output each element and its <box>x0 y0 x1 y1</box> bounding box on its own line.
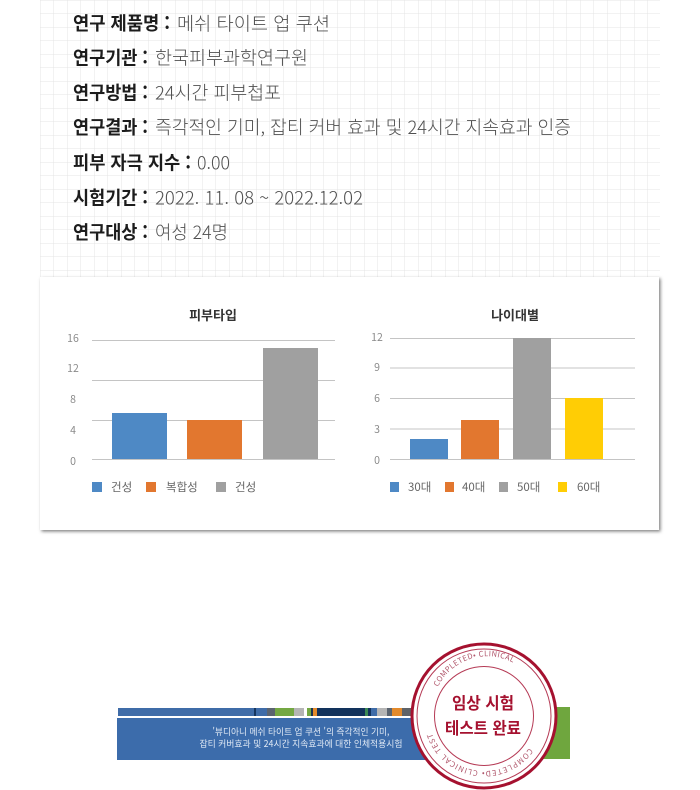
blue caption panel <box>117 718 437 760</box>
curved text <box>426 650 532 776</box>
curved text: COMPLETED• CLINICAL TEST <box>426 735 532 776</box>
y axis labels: 6 <box>374 391 380 406</box>
row: institution: 한국피부과학연구원 <box>155 44 308 70</box>
row: method: 연구방법 : <box>73 80 148 106</box>
stamp: clinical test completed <box>410 642 558 790</box>
stamp title: 임상 시험 <box>452 690 514 714</box>
row: institution <box>73 44 308 70</box>
row: result: 연구결과 : <box>73 114 148 140</box>
chart title: 나이대별 <box>491 305 539 324</box>
caption text: '뷰디아니 메쉬 타이트 업 쿠션 '의 즉각적인 기미, <box>212 724 390 738</box>
stamp title: 테스트 완료 <box>445 715 521 739</box>
y axis labels: 3 <box>374 422 380 437</box>
legend: 40대 <box>462 479 485 495</box>
panel: charts <box>40 277 659 530</box>
green block <box>540 707 570 759</box>
row: test period: 2022. 11. 08 ~ 2022.12.02 <box>155 184 363 210</box>
y axis labels <box>371 330 383 468</box>
row: institution: 연구기관 : <box>73 44 148 70</box>
study details list <box>73 10 571 245</box>
row: method <box>73 80 281 106</box>
row: subjects: 연구대상 : <box>73 219 148 245</box>
y axis labels: 12 <box>371 330 383 345</box>
y axis labels: 8 <box>70 392 76 407</box>
legend <box>390 479 600 495</box>
chart: skin type <box>67 305 335 495</box>
chart title: 피부타입 <box>189 305 237 324</box>
bars <box>112 348 318 459</box>
caption text: 잡티 커버효과 및 24시간 지속효과에 대한 인체적용시험 <box>200 736 402 750</box>
y axis labels <box>67 331 79 469</box>
row: irritation index: 0.00 <box>197 150 230 176</box>
caption text <box>200 724 402 750</box>
chart: age group <box>371 305 635 495</box>
y axis labels: 0 <box>70 454 76 469</box>
legend <box>92 479 256 495</box>
legend: 60대 <box>577 479 600 495</box>
y axis labels: 16 <box>67 331 79 346</box>
y axis labels: 12 <box>67 361 79 376</box>
row: subjects: 여성 24명 <box>155 219 228 245</box>
y axis labels: 9 <box>374 360 380 375</box>
legend: 건성 <box>235 479 256 495</box>
row: product name <box>73 10 330 36</box>
legend: 50대 <box>517 479 540 495</box>
row: product name: 연구 제품명 : <box>73 10 170 36</box>
row: test period: 시험기간 : <box>73 184 148 210</box>
row: result: 즉각적인 기미, 잡티 커버 효과 및 24시간 지속효과 인증 <box>155 114 571 140</box>
legend: 30대 <box>408 479 431 495</box>
row: irritation index: 피부 자극 지수 : <box>73 150 191 176</box>
y axis labels: 0 <box>374 453 380 468</box>
row: product name: 메쉬 타이트 업 쿠션 <box>177 10 330 36</box>
legend: 복합성 <box>166 479 198 495</box>
row: subjects <box>73 219 228 245</box>
row: method: 24시간 피부첩포 <box>155 80 281 106</box>
stamp title <box>445 690 521 739</box>
colour strip <box>118 708 416 716</box>
curved text: COMPLETED• CLINICAL <box>434 650 513 686</box>
legend: 건성 <box>111 479 132 495</box>
y axis labels: 4 <box>70 423 76 438</box>
bars <box>410 338 603 459</box>
